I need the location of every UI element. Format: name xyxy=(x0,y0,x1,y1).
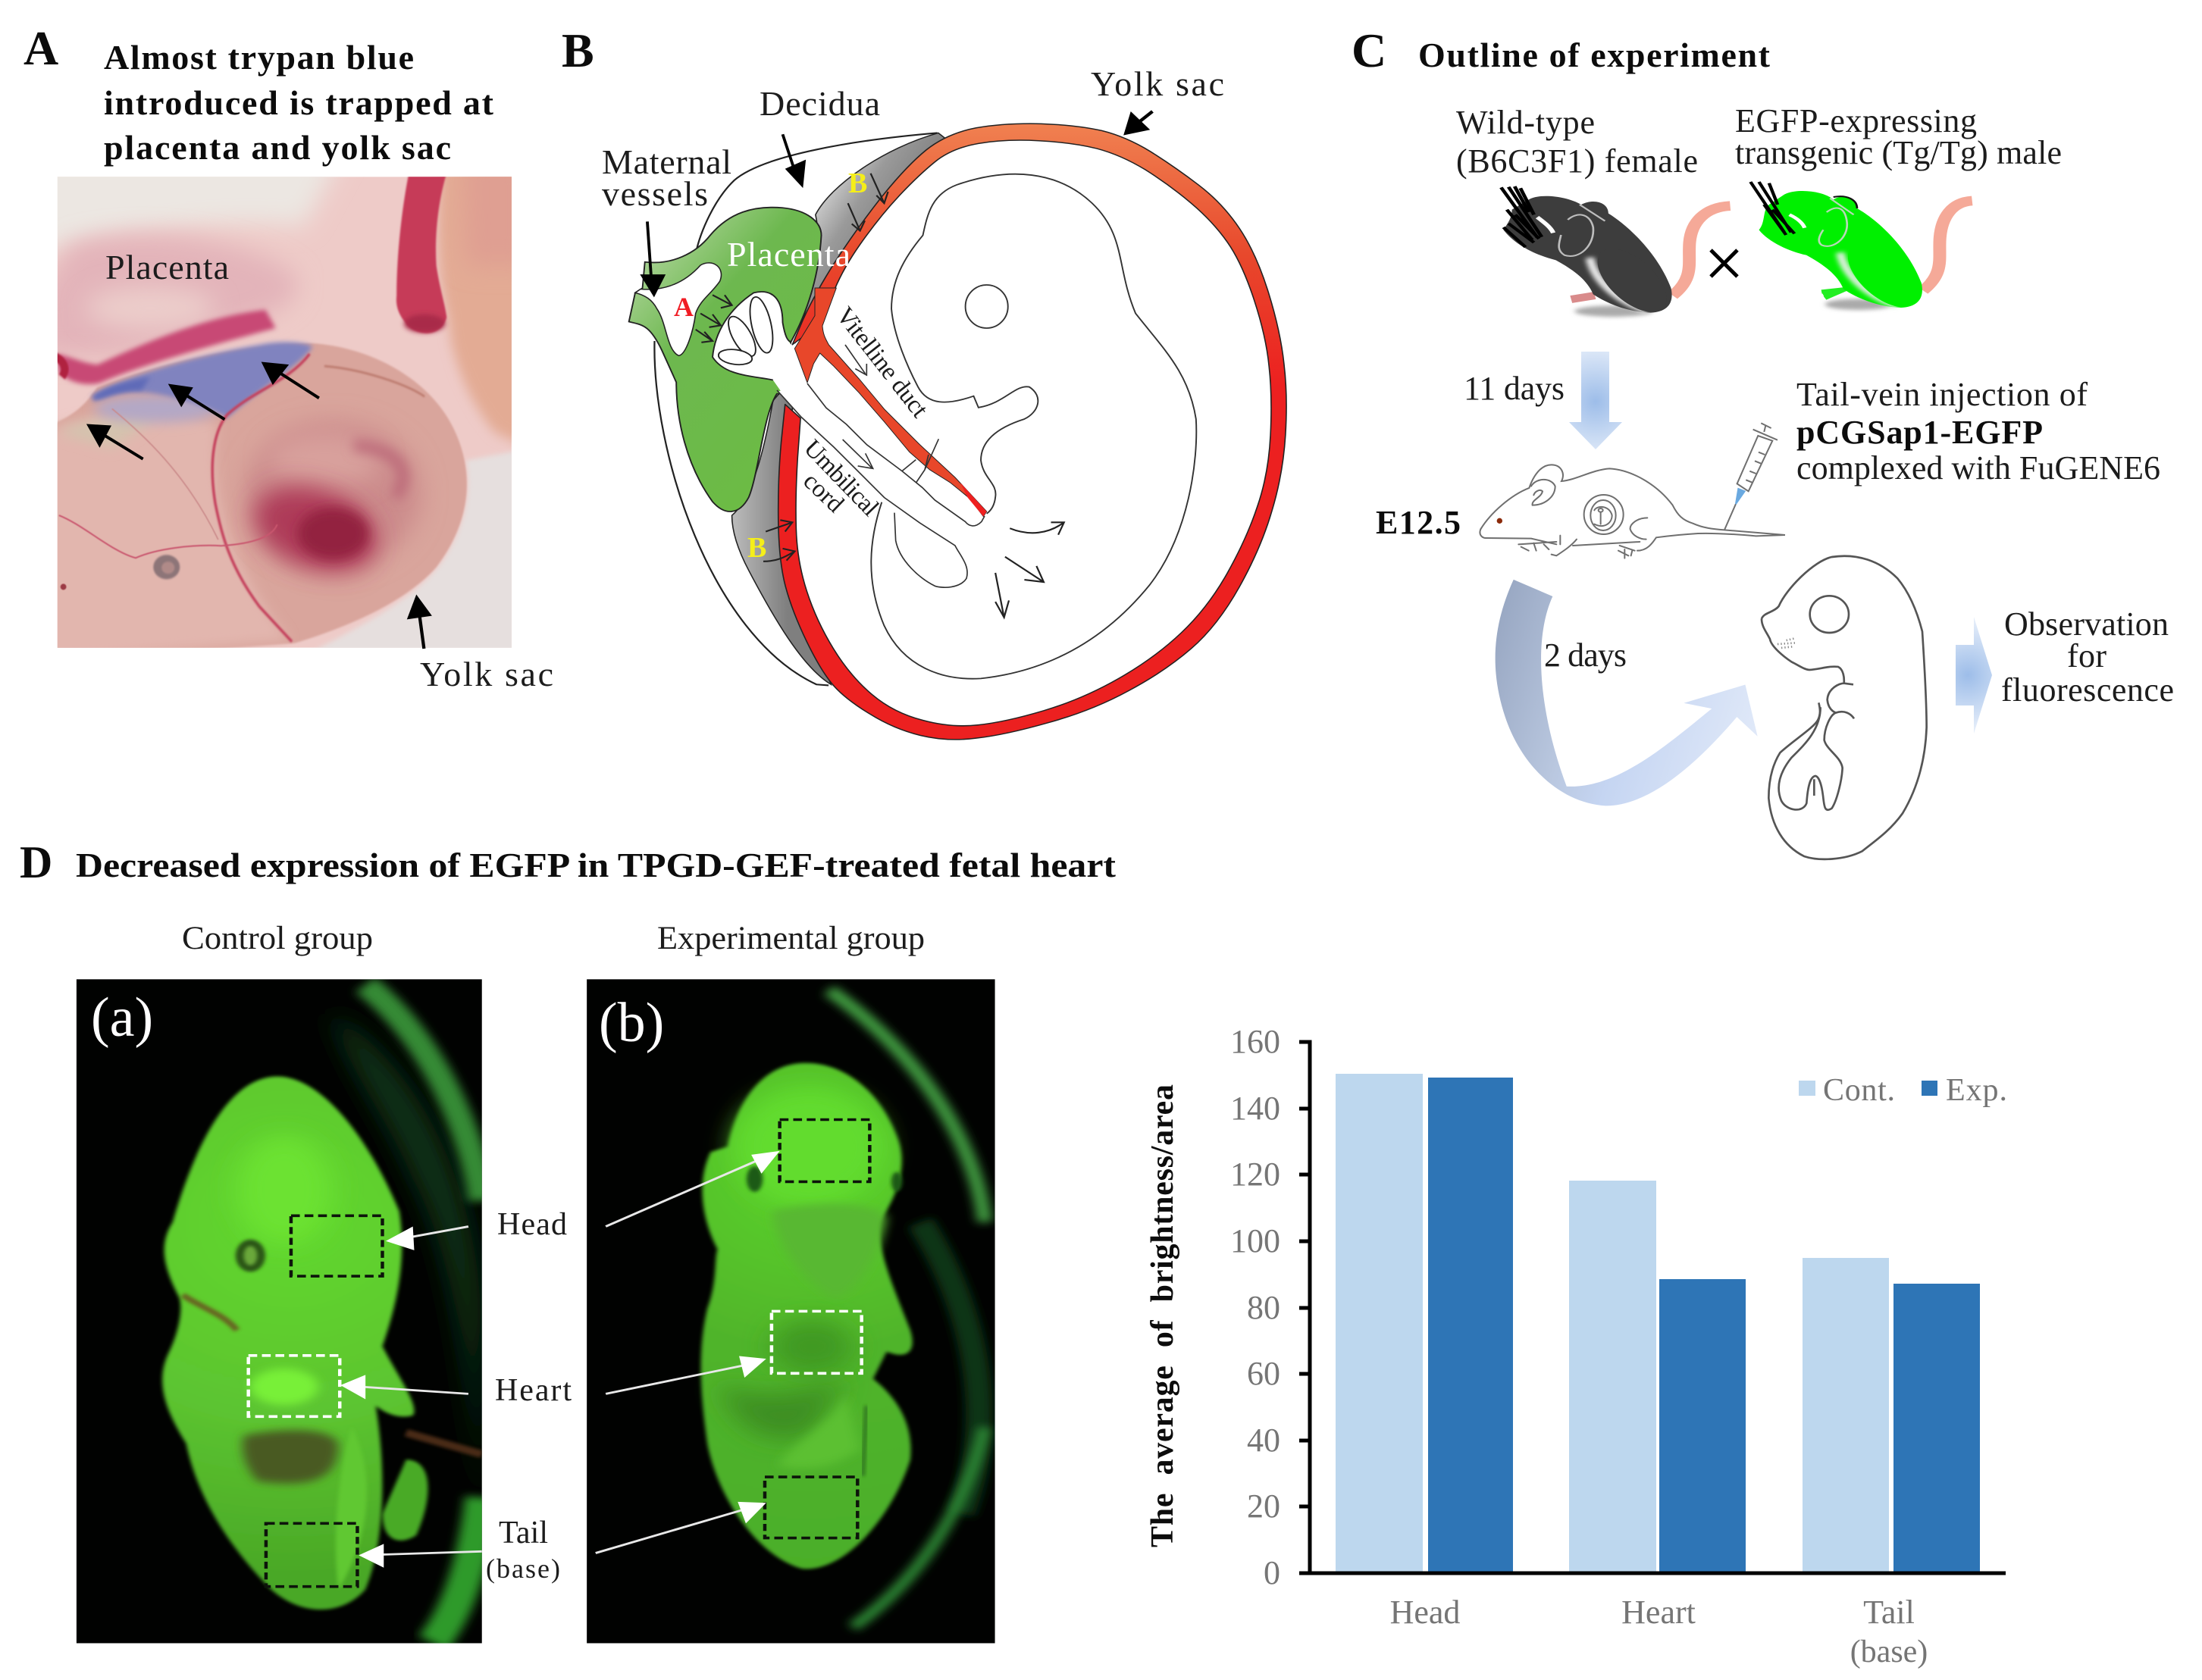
photo: placenta and yolk sac xyxy=(58,177,512,648)
label: observation for fluorescence: for xyxy=(2067,637,2106,674)
label: Head: Head xyxy=(497,1207,567,1242)
panel: C outline of experiment xyxy=(1352,23,2174,859)
box: tail experimental xyxy=(765,1477,857,1538)
label: Yolk sac: Yolk sac xyxy=(1091,64,1224,103)
arrow: 11 days xyxy=(1569,352,1622,449)
y tick labels: 80 xyxy=(1247,1289,1280,1326)
box: heart experimental xyxy=(772,1311,862,1373)
heading: panel A: introduced is trapped at xyxy=(104,83,494,122)
label: Maternal vessels: vessels xyxy=(602,174,708,213)
label: Placenta in photo: Placenta xyxy=(105,248,229,286)
embryo outline xyxy=(871,174,1196,679)
legend: Cont. xyxy=(1823,1073,1895,1108)
label: transgenic male: EGFP-expressing xyxy=(1735,102,1977,139)
y tick labels: 140 xyxy=(1230,1090,1280,1127)
panel letter C: C xyxy=(1352,23,1386,77)
y tick labels: 20 xyxy=(1247,1488,1280,1525)
bars: Head xyxy=(1336,1074,1513,1573)
arrow: 2 days curved xyxy=(1496,580,1758,806)
label: transgenic male xyxy=(1735,102,2062,171)
panel letter D: D xyxy=(20,837,52,887)
placenta xyxy=(629,208,822,512)
label: (a): (a) xyxy=(91,987,153,1049)
bar chart xyxy=(1145,1023,2007,1669)
x category labels: Tail xyxy=(1863,1594,1915,1631)
label: Decidua: Decidua xyxy=(760,84,880,123)
maternal vessel cavity xyxy=(635,263,721,355)
x category labels xyxy=(1390,1594,1928,1669)
decidua outline xyxy=(654,133,938,685)
label: 11 days: 11 days xyxy=(1464,370,1565,407)
y tick labels: 40 xyxy=(1247,1422,1280,1459)
label: Tail (base): (base) xyxy=(486,1553,560,1584)
box: heart control xyxy=(249,1356,340,1416)
arrow: to observation xyxy=(1956,617,1992,734)
label: Maternal vessels: Maternal xyxy=(602,142,731,181)
label: transgenic male: transgenic (Tg/Tg) male xyxy=(1735,134,2062,171)
panel: D EGFP expression xyxy=(20,837,2007,1669)
box: tail control xyxy=(266,1523,357,1587)
label: tail-vein injection: pCGSap1-EGFP xyxy=(1796,414,2043,451)
villi and placental cord end xyxy=(713,292,807,394)
label: site A: A xyxy=(674,292,694,322)
label: Umbilical cord: cord xyxy=(797,468,849,518)
legend: Exp. xyxy=(1946,1073,2007,1108)
x category labels: Head xyxy=(1390,1594,1460,1631)
label: 2 days: 2 days xyxy=(1544,637,1627,674)
panel: B placenta diagram xyxy=(562,23,1286,740)
panel letter B: B xyxy=(562,23,594,77)
bars: Tail xyxy=(1803,1258,1980,1573)
legend xyxy=(1799,1073,2007,1108)
label: E12.5: E12.5 xyxy=(1376,504,1461,541)
label: tail-vein injection: complexed with FuGENE6 xyxy=(1796,449,2160,486)
icon: transgenic green mouse xyxy=(1750,182,1972,316)
photo: control fetus (a) xyxy=(77,979,482,1643)
y tick labels: 120 xyxy=(1230,1156,1280,1193)
label: observation for fluorescence: Observation xyxy=(2004,605,2169,643)
label: (b): (b) xyxy=(599,992,664,1054)
label: site B upper: B xyxy=(848,167,867,199)
label: Control group: Control group xyxy=(182,921,373,956)
label: Umbilical cord: Umbilical xyxy=(798,435,884,521)
label: wild-type female: (B6C3F1) female xyxy=(1456,142,1698,180)
panel letter A: A xyxy=(23,21,58,75)
label: site B lower: B xyxy=(747,532,766,564)
photo: experimental fetus (b) xyxy=(587,979,995,1643)
icon: syringe xyxy=(1724,423,1778,530)
label: Tail (base): Tail xyxy=(499,1516,548,1550)
box: head control xyxy=(291,1215,382,1276)
y tick labels: 160 xyxy=(1230,1023,1280,1060)
black pointer arrows xyxy=(640,111,1152,297)
region boxes and white arrows xyxy=(249,1120,869,1587)
y tick labels: 100 xyxy=(1230,1222,1280,1259)
label: Heart: Heart xyxy=(495,1373,572,1408)
arrows: trypan blue sites xyxy=(86,362,432,649)
y axis title: The average of brightness/area xyxy=(1145,1084,1180,1547)
white arrows xyxy=(340,1151,780,1568)
label: observation for fluorescence: fluorescence xyxy=(2001,671,2174,709)
yolk sac ring xyxy=(778,124,1286,740)
label: wild-type female xyxy=(1456,104,1698,180)
label: Placenta in diagram: Placenta xyxy=(727,235,850,274)
diagram: umbilical cord and vitelline duct xyxy=(777,288,987,587)
x category labels: Heart xyxy=(1621,1594,1696,1631)
heading: panel A xyxy=(104,38,494,167)
label: Experimental group: Experimental group xyxy=(657,921,925,956)
box: head experimental xyxy=(780,1120,869,1181)
y tick labels: 60 xyxy=(1247,1355,1280,1392)
gray layer xyxy=(732,133,952,684)
icon: wild-type black mouse xyxy=(1501,186,1731,321)
illustration: pregnant mouse with syringe xyxy=(1480,423,1785,558)
label: tail-vein injection xyxy=(1796,376,2160,486)
y tick labels xyxy=(1230,1023,1280,1591)
label: Tail (base) xyxy=(486,1516,560,1584)
heading: panel D: Decreased expression of EGFP in TPGD-GEF-treated fetal heart xyxy=(76,846,1117,884)
diagram: conceptus cross section xyxy=(629,111,1286,740)
label: observation for fluorescence xyxy=(2001,605,2174,709)
icon: cross symbol xyxy=(1711,250,1737,277)
illustration: embryo outline xyxy=(1762,556,1927,859)
label: Maternal vessels xyxy=(602,142,731,213)
heading: Outline of experiment: Outline of experiment xyxy=(1418,36,1771,74)
y tick labels: 0 xyxy=(1264,1554,1280,1591)
thin flow arrows xyxy=(696,174,1064,618)
label: tail-vein injection: Tail-vein injection of xyxy=(1796,376,2088,413)
label: wild-type female: Wild-type xyxy=(1456,104,1595,141)
bars: Heart xyxy=(1569,1181,1746,1573)
label: Vitelline duct: Vitelline duct xyxy=(831,302,933,423)
heading: panel A: Almost trypan blue xyxy=(104,38,414,77)
axes and ticks xyxy=(1299,1042,2006,1573)
x category labels: (base) xyxy=(1850,1635,1928,1669)
heading: panel A: placenta and yolk sac xyxy=(104,128,451,167)
label: Yolk sac under photo: Yolk sac xyxy=(420,655,553,693)
panel: A trypan blue photograph xyxy=(23,21,553,693)
